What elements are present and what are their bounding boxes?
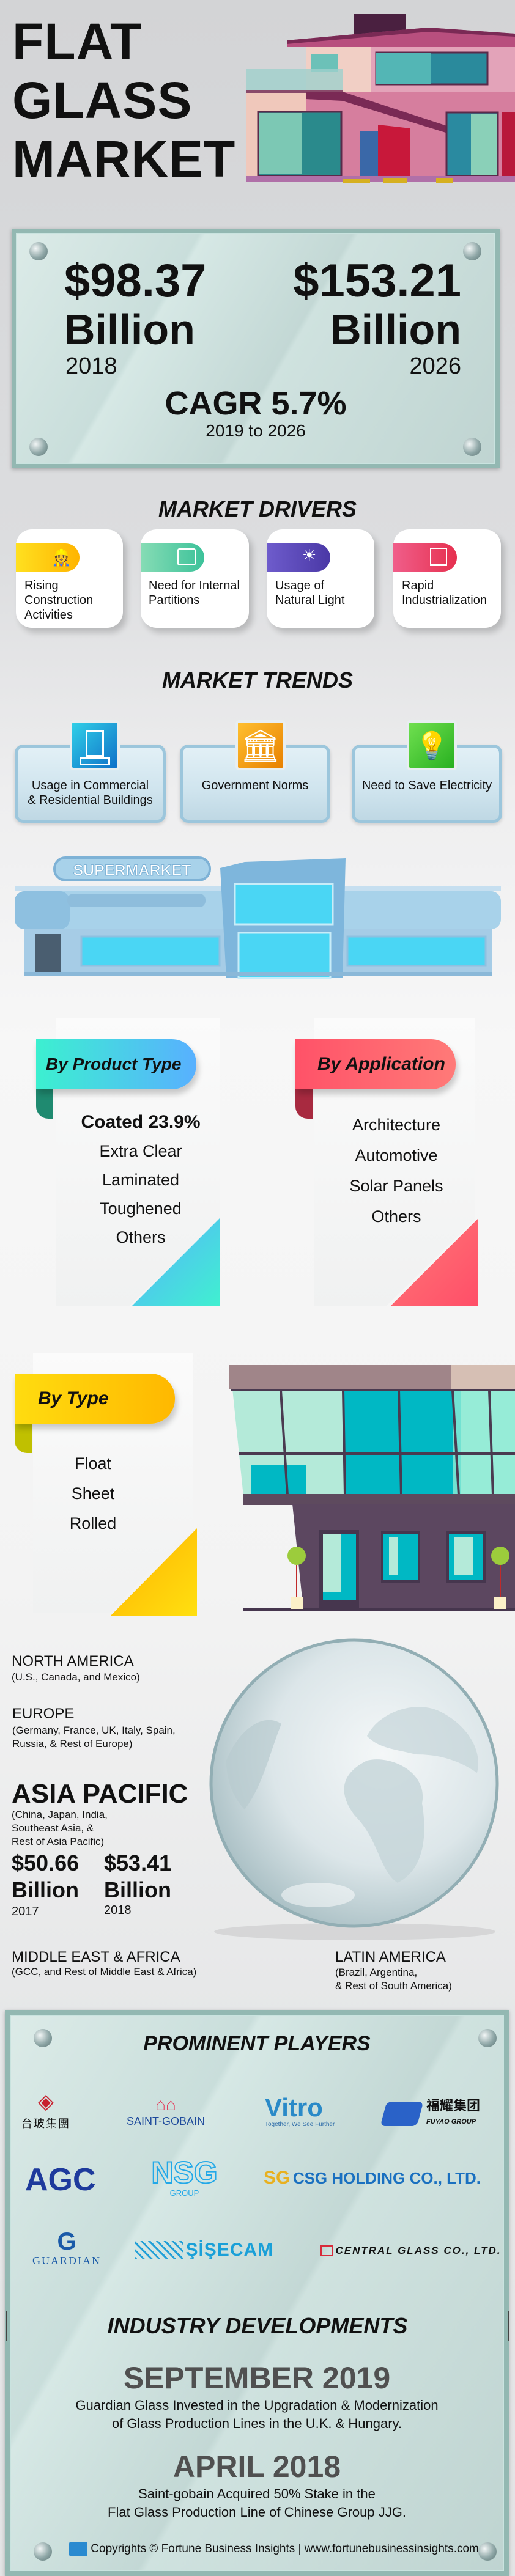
region: north america xyxy=(12,1653,140,1683)
logo: sisecam: ŞİŞECAM xyxy=(185,2240,273,2260)
illustration: office building xyxy=(229,1365,515,1611)
card: internal partitions xyxy=(141,529,249,628)
region: latin america: LATIN AMERICA xyxy=(335,1949,446,1965)
logo: agc: AGC xyxy=(25,2162,96,2198)
card: rising construction: Construction xyxy=(24,594,93,607)
region: north america: NORTH AMERICA xyxy=(12,1653,134,1669)
list: applications: Architecture xyxy=(352,1116,440,1134)
stat: asia pacific 2017: $50.66 xyxy=(12,1850,79,1875)
list: applications: Solar Panels xyxy=(349,1177,443,1195)
list: types: Float xyxy=(75,1454,111,1473)
heading: industry developments xyxy=(6,2311,509,2341)
card: industrialization: Rapid xyxy=(402,579,434,592)
stat: asia pacific 2017: 2017 xyxy=(12,1905,39,1918)
region: asia pacific xyxy=(12,1779,188,1918)
region: europe: (Germany, France, UK, Italy, Spain, xyxy=(12,1724,176,1736)
region: latin america: & Rest of South America) xyxy=(335,1980,452,1992)
card: industrialization xyxy=(393,529,501,628)
stat: 2018 value xyxy=(64,255,206,379)
logo: saint-gobain: SAINT-GOBAIN xyxy=(127,2115,205,2127)
card: internal partitions: Need for Internal xyxy=(149,579,240,592)
list: applications: Others xyxy=(371,1207,421,1226)
list: product types: Extra Clear xyxy=(99,1142,182,1160)
development: september 2019 xyxy=(75,2361,439,2431)
card: natural light: Natural Light xyxy=(275,594,344,607)
corner fold: type xyxy=(110,1528,197,1616)
list: product types xyxy=(81,1112,201,1246)
corner fold: product type xyxy=(132,1218,220,1306)
trend: save electricity: Need to Save Electricity xyxy=(362,779,492,792)
stat: 2018 value: 2018 xyxy=(65,353,117,379)
trend: commercial buildings: & Residential Buildings xyxy=(28,793,153,807)
list: types xyxy=(70,1454,116,1533)
corner fold: application xyxy=(390,1218,478,1306)
logo: vitro xyxy=(265,2093,335,2128)
stat: CAGR xyxy=(165,385,347,440)
development: april 2018: APRIL 2018 xyxy=(173,2449,341,2484)
development: september 2019: of Glass Production Lines in the U.K. & Hungary. xyxy=(112,2416,402,2431)
panel: by application xyxy=(314,1018,475,1306)
region: north america: (U.S., Canada, and Mexico) xyxy=(12,1671,140,1683)
illustration: supermarket: SUPERMARKET xyxy=(73,862,191,879)
panel: market size xyxy=(12,229,500,468)
trend: save electricity xyxy=(352,745,502,823)
logo: taiwan glass xyxy=(21,2090,70,2130)
stat: asia pacific 2018: 2018 xyxy=(104,1904,131,1917)
logo: fuyao xyxy=(382,2098,480,2126)
card: natural light: ☀ xyxy=(302,546,316,564)
stat: asia pacific 2018: Billion xyxy=(104,1877,171,1902)
icon: government: 🏛 xyxy=(240,729,281,764)
region: asia pacific: ASIA PACIFIC xyxy=(12,1779,188,1809)
logo: vitro: Vitro xyxy=(265,2093,323,2122)
illustration: supermarket xyxy=(15,856,501,979)
card: natural light xyxy=(267,529,374,628)
development: september 2019: Guardian Glass Invested in the Upgradation & Modernization xyxy=(75,2398,439,2413)
icon: bulb: 💡 xyxy=(415,731,448,761)
card: rising construction: Rising xyxy=(24,579,59,592)
card: rising construction xyxy=(16,529,123,628)
title: GLASS xyxy=(12,72,192,129)
heading: market trends: MARKET TRENDS xyxy=(162,668,353,693)
card: rising construction: 👷 xyxy=(51,548,71,567)
card: rising construction: Activities xyxy=(24,608,73,622)
icon: building xyxy=(70,720,120,770)
ribbon: by application: By Application xyxy=(317,1054,445,1074)
trend: commercial buildings: Usage in Commercial xyxy=(32,779,149,792)
ribbon: by product type: By Product Type xyxy=(46,1054,181,1073)
region: middle east & africa xyxy=(12,1949,196,1978)
development: september 2019: SEPTEMBER 2019 xyxy=(124,2361,390,2395)
footer: copyright: Copyrights © Fortune Business Insights | www.fortunebusinessinsights.com xyxy=(91,2542,479,2555)
stat: 2026 value: $153.21 xyxy=(293,255,461,307)
stat: CAGR: 2019 to 2026 xyxy=(206,421,306,440)
region: latin america: (Brazil, Argentina, xyxy=(335,1967,417,1978)
logo: sisecam xyxy=(135,2240,273,2260)
illustration: glass globe xyxy=(209,1638,499,1940)
region: latin america xyxy=(335,1949,452,1992)
logo: saint-gobain xyxy=(127,2095,205,2127)
card: internal partitions: Partitions xyxy=(149,594,199,607)
icon: government xyxy=(235,720,286,770)
logo: guardian: G xyxy=(57,2228,76,2255)
stat: 2026 value: 2026 xyxy=(409,353,461,379)
region: asia pacific: Southeast Asia, & xyxy=(12,1822,94,1834)
logo: csg: SG CSG HOLDING CO., LTD. xyxy=(264,2168,481,2188)
development: april 2018: Flat Glass Production Line of Chinese Group JJG. xyxy=(108,2504,406,2520)
icon: bulb xyxy=(407,720,457,770)
stat: asia pacific 2018 xyxy=(104,1850,171,1917)
region: europe xyxy=(12,1706,176,1750)
region: europe: Russia, & Rest of Europe) xyxy=(12,1738,133,1750)
region: middle east & africa: MIDDLE EAST & AFRICA xyxy=(12,1949,180,1965)
list: product types: Toughened xyxy=(100,1199,182,1218)
region: europe: EUROPE xyxy=(12,1706,74,1722)
heading: market drivers: MARKET DRIVERS xyxy=(158,496,357,521)
title: MARKET xyxy=(12,130,235,188)
logo: guardian: GUARDIAN xyxy=(32,2254,101,2267)
development: april 2018 xyxy=(108,2449,406,2520)
logo: vitro: Together, We See Further xyxy=(265,2121,335,2128)
list: types: Rolled xyxy=(70,1514,116,1533)
list: product types: Coated 23.9% xyxy=(81,1112,201,1132)
stat: asia pacific 2017: Billion xyxy=(12,1877,79,1902)
stat: 2026 value: Billion xyxy=(330,306,461,353)
ribbon: by type: By Type xyxy=(38,1388,109,1408)
ribbon: by type xyxy=(13,1374,180,1453)
region: asia pacific: Rest of Asia Pacific) xyxy=(12,1836,104,1847)
logo: taiwan glass: ◈ xyxy=(38,2090,54,2113)
list: applications xyxy=(349,1116,443,1226)
logo: guardian xyxy=(32,2228,101,2267)
trend: government norms: Government Norms xyxy=(202,779,308,792)
card: natural light: Usage of xyxy=(275,579,324,592)
list: applications: Automotive xyxy=(355,1146,438,1165)
stat: asia pacific 2017 xyxy=(12,1850,79,1918)
panel: by product type xyxy=(56,1018,220,1306)
logo: fuyao: 福耀集团 xyxy=(426,2098,480,2113)
illustration: house xyxy=(246,14,515,183)
logo: fuyao: FUYAO GROUP xyxy=(426,2118,476,2125)
logos xyxy=(21,2090,502,2267)
title: FLAT xyxy=(12,13,142,70)
heading: prominent players: PROMINENT PLAYERS xyxy=(143,2032,371,2055)
panel: by type xyxy=(33,1353,193,1613)
development: april 2018: Saint-gobain Acquired 50% Stake in the xyxy=(138,2486,376,2501)
list: types: Sheet xyxy=(72,1484,114,1503)
logo: nsg xyxy=(153,2161,217,2198)
trend: commercial buildings xyxy=(15,745,166,823)
title xyxy=(12,13,235,188)
region: middle east & africa: (GCC, and Rest of Middle East & Africa) xyxy=(12,1966,196,1978)
logo: taiwan glass: 台玻集團 xyxy=(21,2118,70,2130)
stat: 2018 value: $98.37 xyxy=(64,255,206,307)
card: industrialization: Industrialization xyxy=(402,594,487,607)
trend: government norms xyxy=(180,745,330,823)
ribbon: by product type xyxy=(35,1039,201,1119)
stat: CAGR: CAGR 5.7% xyxy=(165,385,347,422)
stat: 2026 value xyxy=(293,255,461,379)
list: product types: Others xyxy=(116,1228,166,1246)
list: product types: Laminated xyxy=(102,1171,179,1189)
logo: nsg: GROUP xyxy=(170,2188,199,2198)
region: asia pacific: (China, Japan, India, xyxy=(12,1809,108,1820)
panel: players and developments xyxy=(5,2010,509,2576)
logo: saint-gobain: ⌂⌂ xyxy=(155,2095,176,2114)
logo: central glass: CENTRAL GLASS CO., LTD. xyxy=(335,2245,502,2256)
heading: industry developments: INDUSTRY DEVELOPMENTS xyxy=(108,2313,407,2338)
stat: 2018 value: Billion xyxy=(64,306,195,353)
stat: asia pacific 2018: $53.41 xyxy=(104,1850,171,1875)
ribbon: by application xyxy=(295,1039,460,1119)
